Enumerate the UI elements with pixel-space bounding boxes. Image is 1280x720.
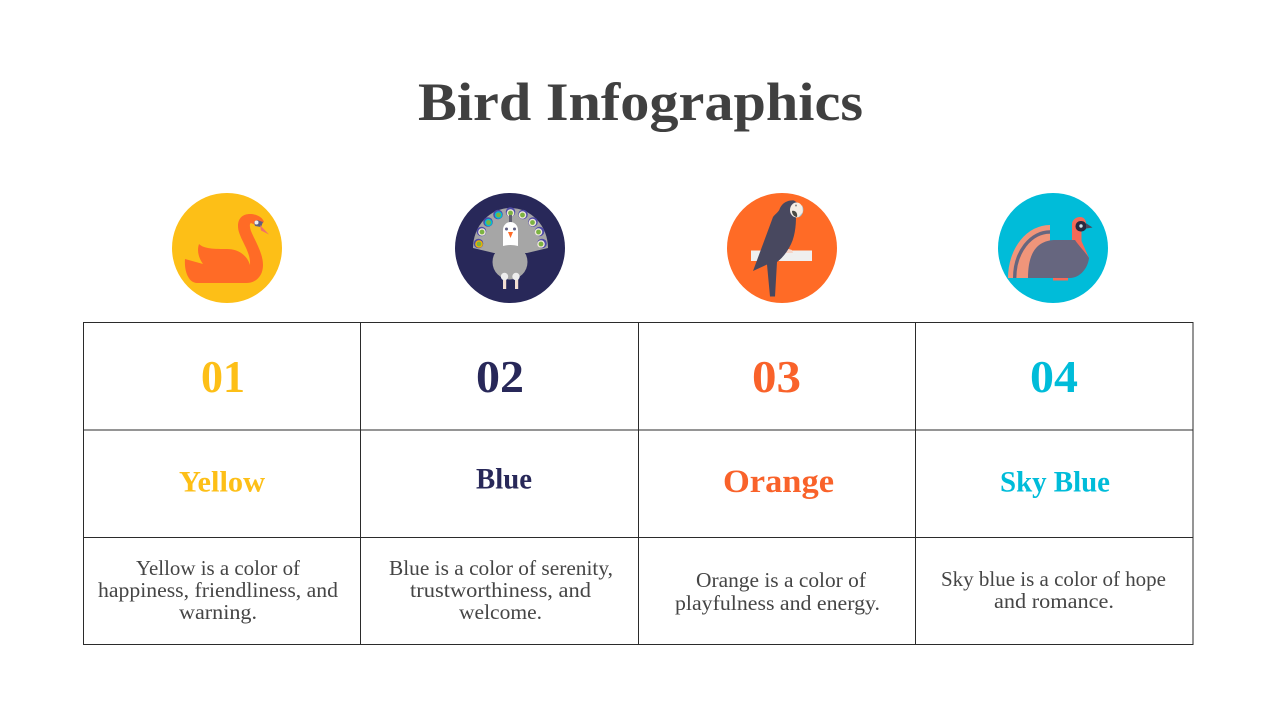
column 01: yellow [98, 351, 338, 624]
description: blue: welcome. [459, 600, 542, 624]
description: blue: trustworthiness, and [410, 578, 591, 602]
description: sky blue: and romance. [994, 589, 1114, 613]
description: sky blue: Sky blue is a color of hope [941, 567, 1166, 591]
icon: orange circle with parrot [727, 193, 837, 303]
number 03: 03 [752, 351, 801, 402]
table grid [83, 322, 1194, 645]
number 02: 02 [476, 351, 524, 402]
icon: sky blue circle with turkey [998, 193, 1108, 303]
icon: yellow circle with swan [172, 193, 282, 303]
heading: Yellow: Yellow [179, 466, 266, 498]
column 03: orange [675, 351, 880, 615]
icon: navy circle with peacock [455, 193, 565, 303]
column 02: blue [389, 351, 613, 624]
description: yellow: warning. [179, 600, 257, 624]
description: orange: Orange is a color of [696, 568, 867, 592]
description: yellow: Yellow is a color of [136, 556, 301, 580]
description: sky blue [941, 567, 1166, 613]
heading: Sky Blue: Sky Blue [1000, 466, 1110, 498]
number 04: 04 [1030, 351, 1078, 402]
description: yellow [98, 556, 338, 624]
heading: Orange: Orange [723, 464, 834, 500]
heading: Blue: Blue [476, 464, 532, 496]
description: orange: playfulness and energy. [675, 591, 880, 615]
description: blue: Blue is a color of serenity, [389, 556, 613, 580]
description: orange [675, 568, 880, 615]
number 01: 01 [201, 351, 245, 402]
description: blue [389, 556, 613, 624]
column 04: sky blue [941, 351, 1166, 613]
description: yellow: happiness, friendliness, and [98, 578, 338, 602]
title: Bird Infographics [418, 71, 863, 132]
